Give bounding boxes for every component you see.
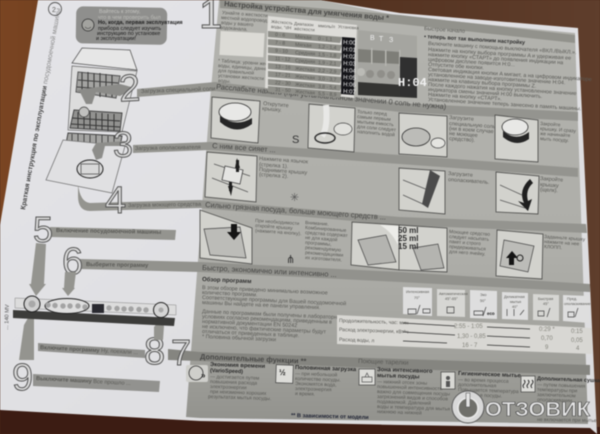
row: salt pictures and text: специальную соль <box>449 121 496 130</box>
row: detergent pictures and text: 25 ml <box>398 234 418 243</box>
row: rinse aid pictures and text: Загрузите <box>448 171 473 179</box>
function: half load: Экономятся вода, <box>295 381 337 388</box>
program cards: Интенсивная <box>406 290 429 294</box>
text: steps for setting hardness: нажмите кнопку «СТАРТ» до появления индикации на <box>428 52 563 66</box>
function: intensive zone: загрязнений видов и способов <box>377 393 448 402</box>
program cards: 45° <box>543 302 549 306</box>
row: salt pictures and text: средство). <box>449 136 475 144</box>
function: hygienic wash: — во время процесса <box>458 377 509 385</box>
table: water hardness settings: H:00 <box>343 40 357 47</box>
row: rinse aid pictures and text: Поднимите крышку <box>259 167 308 176</box>
table: water hardness settings: 2,2 - 2,9 <box>318 68 337 75</box>
table: water hardness settings: H:04 <box>343 68 357 75</box>
function: hygienic wash: Гигиеническое мытье <box>458 371 522 379</box>
function: extra drying <box>521 376 600 424</box>
table: water hardness settings: ммоль/л <box>318 23 336 29</box>
row: detergent pictures and text: (нажмите на кнопку). <box>255 228 302 237</box>
band: step 7 additional functions <box>168 349 590 375</box>
callout: welcome note: Вайтесь к этому, <box>99 8 141 15</box>
text: steps for setting hardness: Установленное значение теперь занесено в память машины. <box>428 97 581 112</box>
text: programs overview: нормативной документации EN 50242 <box>202 318 297 329</box>
band: step 9 power off <box>33 374 160 392</box>
text: programs overview: * Половина обычной загрузки <box>202 333 276 343</box>
table: program parameters: 9 <box>545 345 549 351</box>
band: step 9 power off: Выключите машину Все прошло ... <box>36 376 131 387</box>
table: water hardness settings: 31 - 50 <box>275 87 291 94</box>
row: rinse aid pictures and text: ✳ <box>290 192 299 204</box>
function: hygienic wash: дополнительная <box>458 382 497 389</box>
table: water hardness settings: 1,5 - 1,8 <box>318 52 337 59</box>
program cards: 45°-65° <box>445 297 458 301</box>
band: step 2 special salt: Расслабьте нажать (при установленном значении 0 соль не нужна) <box>216 82 447 111</box>
row: detergent pictures and text: нажмите на нее <box>544 240 580 247</box>
row: detergent pictures and text: откройте крышку <box>255 222 293 232</box>
function: time saving: Экономия времени <box>210 362 266 370</box>
table: water hardness settings: 3,0 - 3,7 <box>318 76 337 83</box>
function: half load: — при небольшой <box>295 370 338 378</box>
function: half load: количестве посуды. <box>295 376 341 384</box>
table: program parameters: 0,70 <box>541 336 553 342</box>
row: detergent pictures and text: Задвиньте крышку <box>544 234 586 243</box>
table: program parameters: 4 <box>576 346 580 352</box>
table: water hardness settings: 1,2 - 1,4 <box>318 44 337 51</box>
control panel strip <box>13 296 176 326</box>
callout: welcome note <box>76 6 183 45</box>
band: step 8 start program: Включите программу Ну, поехали ... <box>40 345 139 356</box>
function: half load <box>276 365 357 398</box>
table: program parameters: Расход электроэнергии, кВт*ч <box>339 327 409 335</box>
program cards: 70° <box>414 296 420 300</box>
wood table bottom edge <box>0 408 600 434</box>
band: step 3 rinse aid: Загрузка ополаскивателя <box>135 145 201 152</box>
watermark logo: ОТЗОВИК <box>485 399 591 421</box>
program cards: 50° <box>480 299 486 303</box>
text: steps for setting hardness: Нажмите на кнопку «СТАРТ». <box>428 92 502 103</box>
text: water hardness intro: Узнайте о жесткости <box>222 9 268 19</box>
text: water hardness intro: воды. <box>218 79 231 85</box>
row: detergent pictures and text: ⋔ <box>286 254 295 266</box>
text: programs overview: не исключено, что фактические параметры будут <box>202 324 327 335</box>
function: extra drying: — путем повышения <box>537 382 586 390</box>
table: water hardness settings: Жесткая <box>295 66 315 73</box>
row: salt pictures and text: Закройте <box>540 120 561 128</box>
page badge: 2 <box>52 7 56 14</box>
function: intensive zone: — нижний отсек зоны <box>377 378 428 387</box>
table: program parameters: 0:29 * <box>539 327 555 333</box>
table: water hardness settings: Жесткая <box>295 74 315 81</box>
table: program parameters: 1,30 - 0,85 <box>457 334 486 340</box>
table: water hardness settings: 7 - 8 <box>275 40 285 47</box>
row: detergent pictures and text: КЛОПП. <box>544 244 562 251</box>
function: hygienic wash: для мытья посуды. <box>458 392 502 400</box>
number 9: 9 <box>12 357 33 399</box>
band: step 3 rinse aid <box>133 141 578 177</box>
table: water hardness settings: H:05 <box>343 75 357 82</box>
function: half load: электроэнергия <box>295 386 332 393</box>
text: programs overview: отличаться от приведенных в таблице. <box>202 329 299 339</box>
row: detergent pictures and text: рекомендациями <box>305 251 344 259</box>
row: detergent pictures and text: программы, <box>305 241 332 248</box>
illustration: control panel close-up: В <box>370 35 375 42</box>
text: water hardness intro: водоканала. <box>220 26 248 33</box>
table: program parameters: 0:15 <box>571 329 583 335</box>
arrow: step 8 to start button <box>154 322 164 340</box>
table: program parameters <box>337 315 592 354</box>
function: time saving <box>186 362 271 402</box>
row: salt pictures and text: самым первым <box>357 115 391 123</box>
row: salt pictures and text: мытьем емкость <box>357 120 394 128</box>
arrow: step 5 to power button <box>29 243 46 296</box>
function: intensive zone <box>359 367 451 417</box>
text: programs overview: Данные по программам были получены в лабораторных <box>202 309 344 321</box>
table: water hardness settings: 9 - 10 <box>275 48 288 55</box>
band: step 4 detergent <box>78 184 587 233</box>
row: salt pictures and text: не моющее <box>449 131 478 139</box>
function: half load: ½ <box>279 368 286 377</box>
function: extra drying: ополаскивании <box>537 397 572 404</box>
number 8: 8 <box>144 331 165 373</box>
callout: welcome note: прибора следует изучить <box>98 26 161 32</box>
side heading <box>4 7 63 330</box>
illustration: control panel close-up: Т <box>379 36 384 43</box>
function: half load: Половинная загрузка <box>295 365 357 373</box>
function: time saving: электроэнергии <box>210 384 247 391</box>
row: salt pictures and text: же начинайте <box>540 130 571 139</box>
table: water hardness settings: H:07 <box>343 89 357 96</box>
row: detergent pictures and text: 15 ml <box>398 242 418 251</box>
band: step 4 detergent: Загрузка моющего средства <box>128 202 202 209</box>
row: rinse aid pictures and text: ополаскиватель. <box>448 177 490 186</box>
function: time saving: при неизменно хороших <box>210 389 267 397</box>
program cards: eco <box>487 311 495 316</box>
table: water hardness settings: Средняя <box>295 58 316 65</box>
band: step 6 program <box>80 259 590 292</box>
table: water hardness settings: воды, °dH <box>271 24 291 30</box>
row: rinse aid pictures and text: крышку <box>540 182 559 189</box>
function: extra drying: температуры при <box>537 387 578 394</box>
table: water hardness settings: H:03 <box>343 61 357 68</box>
table: water hardness settings: H:06 <box>343 82 357 89</box>
row: rinse aid pictures and text <box>205 152 563 214</box>
side heading: Краткая инструкция по эксплуатации посудомоечной машины <box>19 7 63 210</box>
function: extra drying: Дополнительная сушка <box>537 376 600 384</box>
table: water hardness settings: 17 - 21 <box>275 72 291 79</box>
text: steps for setting hardness <box>424 33 592 112</box>
text: steps for setting hardness: Отпустите обе кнопки. <box>428 62 484 71</box>
callout: welcome note: что в чем проверить был <box>98 15 161 21</box>
text: steps for setting hardness: установленное на заводе-изготовителе значение H:04. <box>428 72 565 86</box>
illustration: control panel close-up <box>357 30 427 98</box>
program cards: Автоматическая <box>439 292 468 296</box>
function: intensive zone: подаваемой. Давлений <box>377 398 431 407</box>
arrow: step 3 to rinse aid <box>92 141 125 160</box>
row: salt pictures and text: Загрузите <box>449 115 474 123</box>
callout: welcome note: и эксплуатации! <box>96 36 136 42</box>
band: step 7 additional functions: Дополнительные функции ** <box>200 352 307 366</box>
function: intensive zone: воды и температура для мытья <box>377 404 450 413</box>
function: hygienic wash <box>441 371 522 400</box>
text: programs overview: условиях согласно рекомендациям, приведенным в <box>202 314 332 326</box>
row: detergent pictures and text: их изготовителя. <box>305 256 342 264</box>
text: steps for setting hardness: Световая индикация кнопки A мигает, а на цифровом индикаторе <box>428 67 592 83</box>
band: step 6 program: Быстро, экономично или интенсивно ... <box>202 263 337 279</box>
text: programs overview: Обзор программ <box>202 276 252 285</box>
function: intensive zone: мытья посуды <box>377 373 420 380</box>
table: water hardness settings <box>265 16 360 98</box>
number 2: 2 <box>118 67 141 111</box>
table: water hardness settings: Установка <box>338 24 360 30</box>
band: water softener heading: Быстрое начало <box>424 26 465 35</box>
row: salt pictures and text: Только перед <box>357 109 387 118</box>
arrow: step 6 to program keys <box>62 272 76 296</box>
text: water hardness intro: воды, единицы, данные <box>218 64 271 73</box>
illustration: control panel close-up: H:04 <box>398 76 427 90</box>
band: step 6 program: Выберите программу <box>86 261 149 269</box>
table: water hardness settings: Жесткая <box>295 82 315 89</box>
row: salt pictures and text <box>211 97 577 162</box>
table: water hardness settings: 22 - 30 <box>275 80 291 87</box>
text: steps for setting hardness: Включите машину с помощью выключателя «ВКЛ./ВЫКЛ.». <box>428 41 577 56</box>
row: salt pictures and text: Открутите <box>263 101 289 109</box>
text: steps for setting hardness: После каждого нажатия на кнопку установленное значение <box>428 82 577 97</box>
row: detergent pictures and text: Комбинированные <box>305 225 347 234</box>
text: steps for setting hardness: ▪ теперь вот так выполним настройку <box>424 33 525 46</box>
function: time saving: (VarioSpeed) <box>210 368 243 375</box>
band: step 4 detergent: Сильно грязная посуда, больше моющего средств ... <box>205 200 386 222</box>
function: hygienic wash: Повышается температура <box>458 387 519 395</box>
number 5: 5 <box>33 209 53 250</box>
watermark logo <box>452 391 591 423</box>
program cards: мытья <box>510 300 521 304</box>
band: step 7 additional functions: Поющие тарелки <box>358 358 409 367</box>
text: steps for setting hardness: Нажмите на кнопку выбора программы A и удерживая ее <box>428 47 571 62</box>
table: water hardness settings: Жёсткость <box>271 19 294 26</box>
function: time saving: повышения расхода <box>210 379 257 387</box>
program cards: Быстрая <box>538 297 553 301</box>
arrow: step 2 to salt <box>76 84 135 104</box>
text: water hardness intro: установки жесткости <box>218 74 265 82</box>
grey instruction panel <box>186 0 588 424</box>
text: steps for setting hardness: цифровом дисплее появится H:0... <box>428 57 515 68</box>
row: salt pictures and text: наполнить водой <box>357 128 395 138</box>
row: detergent pictures and text: не для каждой <box>305 234 338 243</box>
table: program parameters: 0,05 <box>571 338 583 344</box>
number 4: 4 <box>105 180 126 222</box>
function: intensive zone: Зона интенсивного <box>377 367 433 375</box>
row: rinse aid pictures and text: Нажмите на язычок <box>259 156 309 165</box>
text: water hardness intro: воды у вашего <box>221 21 254 28</box>
function: extra drying: заключительном <box>537 392 576 399</box>
band: step 3 rinse aid: С ним все сияет ... <box>212 141 276 154</box>
table: water hardness settings: 13 - 16 <box>275 64 291 71</box>
program cards <box>403 287 591 323</box>
function: half load: и время. <box>295 391 315 398</box>
text: water hardness intro <box>218 9 283 85</box>
program cards: 40° <box>512 305 518 309</box>
band: step 5 power on: Включение посудомоечной машины <box>56 227 161 236</box>
row: detergent pictures and text: придерживаться <box>449 245 486 253</box>
table: water hardness settings: Средняя <box>295 50 316 57</box>
row: detergent pictures and text: Внимание. <box>305 220 329 228</box>
row: salt pictures and text: мыть посуду. <box>540 137 569 144</box>
footnote: ** В зависимости от модели <box>291 413 369 421</box>
text: water hardness intro: для правильной <box>218 67 255 77</box>
row: salt pictures and text: крышку. И сразу <box>540 126 577 135</box>
callout: welcome note: Но, когда, первая эксплуатация <box>98 20 183 26</box>
table: water hardness settings: Мягкая <box>295 34 312 41</box>
row: detergent pictures and text: следует насыпать <box>449 235 490 243</box>
table: program parameters: 2:55 - 1:05 <box>454 324 483 330</box>
row: rinse aid pictures and text: (стрелка 1). <box>259 162 288 170</box>
table: water hardness settings: жёсткости <box>294 26 315 32</box>
table: program parameters: Продолжительность, час: мин <box>339 318 409 326</box>
text: water hardness intro: местной водопровод. <box>221 14 269 24</box>
function: time saving: » <box>201 371 206 380</box>
band: water softener heading <box>220 0 575 43</box>
table: water hardness settings: Мягкая <box>295 42 312 49</box>
row: salt pictures and text: для соли следует <box>357 125 397 133</box>
program cards: Деликатная <box>504 295 525 299</box>
function: time saving: — достигается путем <box>210 374 260 382</box>
band: step 2 special salt <box>137 82 578 121</box>
table: water hardness settings: 5,5 - 8,9 <box>318 91 337 98</box>
row: salt pictures and text: S <box>292 134 299 146</box>
number 3: 3 <box>113 124 133 165</box>
text: programs overview: Соответствующие программы для Вашей посудомоечной <box>202 294 346 307</box>
text: programs overview: количество программ. <box>202 290 258 298</box>
table: water hardness settings: H:02 <box>343 54 357 61</box>
table: water hardness settings: 1,9 - 2,1 <box>318 60 337 67</box>
row: detergent pictures and text: рекомендуемую <box>305 246 341 254</box>
program cards: Эко <box>480 293 487 297</box>
table: water hardness settings: 3,8 - 5,4 <box>318 84 337 91</box>
row: rinse aid pictures and text: (щелк). <box>540 187 558 194</box>
function: intensive zone: важно для совмещения посуды <box>377 389 451 398</box>
arrow: step 9 to power button <box>19 317 34 360</box>
illustration: control panel close-up: З <box>389 37 393 44</box>
row: detergent pictures and text: Моющее средство <box>449 229 491 238</box>
text: programs overview: машины Вы найдете на ее панели управления. <box>202 299 321 311</box>
illustration: dishwasher <box>46 48 137 193</box>
table: water hardness settings: 11 - 12 <box>275 56 291 63</box>
text: programs overview <box>202 276 346 343</box>
function: intensive zone: повышенной интенсивности <box>377 383 443 392</box>
text: water hardness intro: * Таблица: уровни жесткости <box>218 58 283 68</box>
table: water hardness settings: Диапазон <box>294 21 314 27</box>
callout: welcome note: инструкцию по установке <box>97 31 160 37</box>
row: detergent pictures and text: средства содержат <box>305 231 349 239</box>
function: time saving: результатах мытья посуды. <box>208 394 271 402</box>
table: water hardness settings: Жесткая <box>295 89 315 96</box>
page badge <box>48 2 62 16</box>
text: steps for setting hardness: нажмите на клавишу выбора программы Z. <box>428 77 536 90</box>
number 6: 6 <box>62 241 83 283</box>
program cards: Пред. <box>567 297 577 301</box>
table: water hardness settings: 0 - 1,1 <box>318 36 333 43</box>
row: detergent pictures and text: для него ячейку. <box>449 248 486 258</box>
row: detergent pictures and text: При необходимости <box>255 218 300 227</box>
row: salt pictures and text: (ни в коем случае <box>449 126 494 135</box>
row: salt pictures and text: крышку. <box>262 106 282 114</box>
number 7: 7 <box>171 332 191 373</box>
band: step 5 power on <box>50 227 176 240</box>
text: programs overview: В этом обзоре приведено минимально возможное <box>202 285 328 296</box>
table: water hardness settings: H:01 <box>343 47 357 54</box>
program cards: ополаскивание <box>564 302 591 306</box>
row: rinse aid pictures and text: Закройте <box>540 175 563 184</box>
side heading: ... 140 MV <box>4 304 11 330</box>
row: rinse aid pictures and text: (стрелка 2). <box>259 172 288 180</box>
band: step 8 start program <box>38 343 145 358</box>
table: program parameters: 16 - 7 <box>462 343 478 349</box>
band: step 2 special salt: Загрузка специальной соли <box>141 85 215 95</box>
row: detergent pictures and text: пакет и строго <box>449 240 481 247</box>
row: detergent pictures and text: 50 ml <box>398 226 418 235</box>
table: water hardness settings: 0 - 6 <box>275 32 285 39</box>
table: program parameters: Расход воды, л <box>339 337 375 344</box>
function: intensive zone: нижнюю на нижней <box>377 408 422 417</box>
row: detergent pictures and text <box>200 210 586 279</box>
function: extra drying: не включается при мытье <box>537 417 597 424</box>
text: steps for setting hardness: индикатора смены значений H:00 выключить. <box>428 86 543 100</box>
